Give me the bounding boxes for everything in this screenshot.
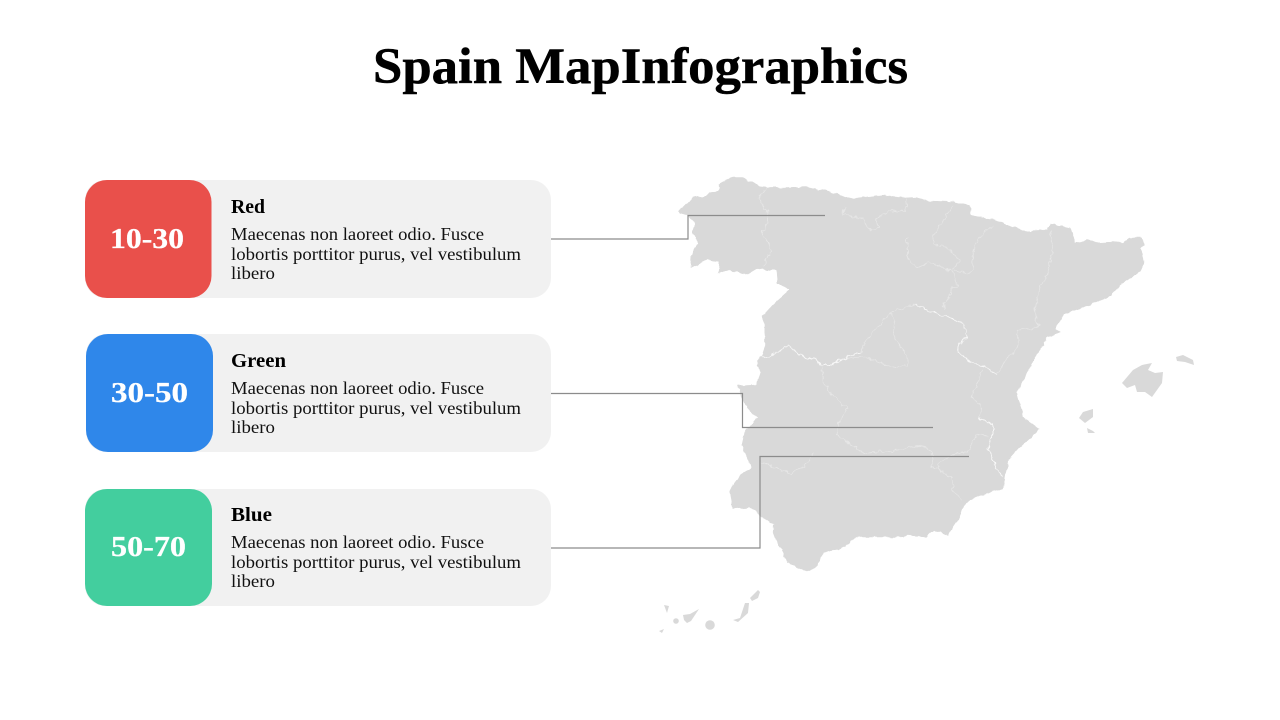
description: Maecenas non laoreet odio. Fusce — [231, 378, 484, 398]
description: lobortis porttitor purus, vel vestibulum — [231, 244, 521, 264]
description: libero — [231, 571, 275, 591]
heading: Blue — [231, 504, 272, 526]
connector: Blue to map — [551, 456, 969, 548]
description — [231, 224, 521, 283]
region borders — [758, 188, 1053, 500]
range value: 30-50 — [111, 378, 188, 409]
panel: Red — [85, 180, 551, 298]
connector: Red to map — [551, 216, 825, 239]
mainland silhouette — [679, 177, 1145, 571]
Canary islands — [659, 590, 760, 633]
badge — [85, 489, 212, 606]
description — [231, 378, 521, 437]
card background — [85, 489, 551, 606]
heading: Green — [231, 350, 287, 372]
Balearic islands — [1079, 355, 1194, 433]
connector: Green to map — [551, 394, 933, 428]
badge — [86, 334, 213, 452]
map of Spain — [659, 177, 1194, 633]
card background — [85, 180, 551, 298]
title: Spain MapInfographics — [373, 39, 908, 95]
range value: 10-30 — [110, 224, 184, 255]
description: Maecenas non laoreet odio. Fusce — [231, 532, 484, 552]
panel: Green — [86, 334, 551, 452]
range value: 50-70 — [111, 532, 186, 563]
panel: Blue — [85, 489, 551, 606]
badge — [85, 180, 212, 298]
description: lobortis porttitor purus, vel vestibulum — [231, 398, 521, 418]
description: lobortis porttitor purus, vel vestibulum — [231, 552, 521, 572]
description: libero — [231, 263, 275, 283]
description — [231, 532, 521, 591]
card background — [86, 334, 551, 452]
description: Maecenas non laoreet odio. Fusce — [231, 224, 484, 244]
description: libero — [231, 417, 275, 437]
heading: Red — [231, 196, 266, 218]
